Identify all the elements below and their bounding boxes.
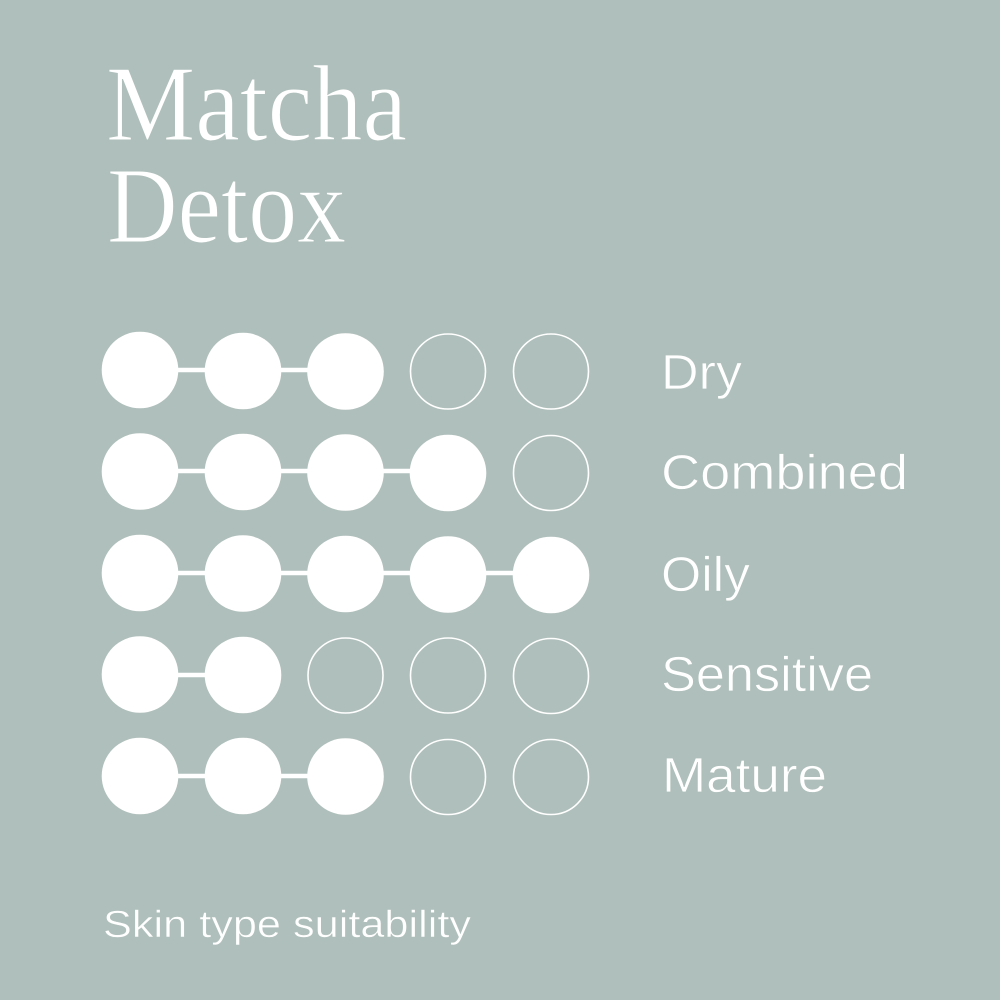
rating row: Mature: Mature <box>662 749 827 803</box>
rating row: Combined <box>102 433 908 511</box>
rating row: Oily: Oily <box>661 548 751 602</box>
rating row: Oily <box>102 535 751 613</box>
rating row: Combined: Combined <box>661 446 908 500</box>
rating row: Sensitive <box>102 636 873 714</box>
title: Detox <box>107 147 346 266</box>
title <box>106 45 407 266</box>
rating row: Dry: Dry <box>661 346 743 400</box>
rating row: Sensitive: Sensitive <box>661 648 873 702</box>
rating row: Mature <box>102 738 827 815</box>
caption: Skin type suitability <box>103 904 471 946</box>
rating row: Dry <box>102 332 743 410</box>
title: Matcha <box>106 45 407 164</box>
